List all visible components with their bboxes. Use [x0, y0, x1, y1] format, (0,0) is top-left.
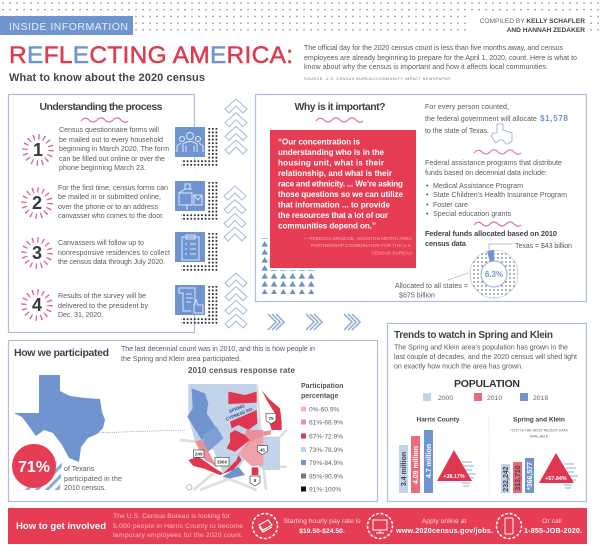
quote box: — REBECCA BRISCOE, HOUSTON METRO AREA	[303, 236, 413, 241]
texas map	[14, 375, 105, 462]
section tab: inside information: INSIDE INFORMATION	[9, 21, 128, 33]
chart title: POPULATION	[454, 378, 520, 390]
label: all states: $675 billion	[399, 292, 435, 300]
chart: spring and klein: 313,710	[515, 465, 522, 491]
step 2	[24, 184, 168, 220]
intro text: know about why the census is important and how it affects local communities.	[304, 63, 548, 71]
chart: harris county: 3.4 million	[401, 452, 408, 486]
body: The U.S. Census Bureau is looking for	[113, 513, 231, 520]
chart: spring and klein: *2017 IS THE MOST RECENT DATA	[510, 428, 568, 432]
chevrons up, top	[225, 99, 247, 154]
chart: spring and klein: 232,242	[503, 466, 510, 492]
bullet list: State Children’s Health Insurance Program	[433, 191, 567, 199]
donut heading: Federal funds allocated based on 2010	[425, 229, 557, 238]
step 4: Dec. 31, 2020.	[58, 311, 103, 319]
quote box: communities depend on.”	[278, 222, 376, 230]
intro text	[304, 44, 577, 71]
chart legend	[423, 393, 548, 402]
legend: 85%-90.9%	[309, 474, 343, 480]
header dot pattern	[0, 0, 600, 34]
callout text	[64, 465, 122, 492]
precinct map: 45	[260, 447, 265, 452]
heading: How to get involved	[16, 521, 106, 532]
intro: the Spring and Klein area participated.	[121, 355, 241, 363]
per-person allocation: For every person counted,	[425, 103, 509, 111]
quote box: relationship, and what is their	[278, 169, 393, 178]
quote box: CENSUS BUREAU	[372, 250, 413, 256]
section tab: inside information	[0, 16, 133, 35]
phone number: 1-855-JOB-2020.	[524, 526, 582, 535]
per-person allocation: the federal government will allocate	[425, 115, 537, 123]
apply online	[395, 518, 493, 535]
panel: how we participated	[8, 340, 378, 502]
intro	[121, 345, 315, 363]
divider	[488, 416, 490, 495]
step 1: beginning in March 2020. The form	[59, 145, 169, 153]
body text	[394, 344, 577, 370]
icon: computer	[368, 514, 392, 538]
chevrons up, bottom	[225, 273, 247, 328]
quote box: those questions so we can utilize	[278, 190, 403, 199]
chart: spring and klein: *366,577	[527, 462, 534, 490]
quote box: housing unit, what is their	[278, 158, 385, 168]
apply online: Apply online at	[422, 518, 466, 525]
quote box: understanding who is in the	[278, 148, 384, 157]
step 1	[25, 126, 169, 172]
quote box: the resources that a lot of our	[278, 211, 389, 220]
chevrons up, middle	[224, 186, 246, 241]
per-person allocation	[425, 103, 569, 135]
callout: 71 percent: 71%	[18, 459, 50, 476]
panel: understanding the process	[8, 94, 194, 332]
programs intro: Federal assistance programs that distribute	[425, 159, 562, 167]
icon: people	[175, 127, 218, 168]
apply online: www.2020census.gov/jobs.	[395, 526, 493, 535]
step 1: 1	[33, 140, 43, 160]
chart: spring and klein: AVAILABLE	[530, 434, 549, 438]
legend	[301, 383, 343, 494]
legend: 0%-60.9%	[309, 406, 340, 414]
step 2: be mailed in or submitted online,	[58, 193, 161, 201]
quote box: that information ... to provide	[278, 200, 390, 210]
panel: how to get involved	[8, 508, 587, 544]
chart legend: 2010	[487, 395, 502, 402]
precinct map: 8	[254, 478, 257, 483]
credit: COMPILED BY KELLY SCHAFLER	[480, 18, 585, 25]
bullet list: Medical Assistance Program	[433, 182, 523, 190]
title: REFLECTING AMERICA:	[9, 42, 293, 69]
quote box: “Our concentration is	[278, 138, 360, 146]
callout text: of Texans	[64, 465, 95, 473]
phone number: Or call	[542, 518, 562, 525]
donut heading	[425, 229, 557, 248]
chart: harris county: Harris County	[417, 416, 460, 424]
body: 5,000 people in Harris County to become	[113, 523, 243, 530]
step 3: Canvassers will follow up to	[58, 239, 144, 247]
chart: spring and klein: Spring and Klein	[513, 416, 565, 424]
map title: 2010 census response rate	[188, 366, 296, 375]
intro text: employees are already beginning to prepare for the April 1, 2020, count. Here is what to	[304, 54, 577, 62]
icon: phone	[496, 514, 522, 538]
chart: harris county: +38.17%	[443, 474, 465, 480]
programs intro	[425, 159, 562, 177]
chevrons right	[268, 314, 360, 330]
step 4: 4	[32, 295, 42, 315]
bullet list: Special education grants	[433, 210, 511, 218]
squiggle	[474, 222, 521, 226]
icon: clipboard	[175, 232, 218, 272]
step 4: delivered to the president by	[58, 302, 148, 310]
source: SOURCE: U.S. CENSUS BUREAU/COMMUNITY IMPACT NEWSPAPER	[304, 77, 450, 81]
icon: mailbox	[175, 181, 218, 222]
heading: How we participated	[14, 347, 109, 359]
step 1: Census questionnaire forms will	[59, 126, 159, 134]
callout text: participated in the	[64, 475, 122, 483]
step 3: 3	[32, 243, 42, 263]
bullet list	[426, 182, 567, 218]
step 2: 2	[32, 193, 42, 213]
bullet list: •	[426, 201, 429, 209]
heading: Understanding the process	[40, 101, 163, 113]
icon: texas outline	[491, 124, 512, 144]
precinct map: CYPRESS RD.	[225, 406, 254, 422]
icon: document and hand	[175, 285, 218, 326]
donut heading: census data	[425, 239, 467, 248]
bullet list: •	[426, 210, 429, 218]
legend: Participation	[301, 383, 343, 390]
per-person allocation: $1,578	[540, 114, 569, 123]
squiggle	[474, 150, 521, 154]
chart: spring and klein	[501, 416, 578, 493]
body	[113, 513, 243, 539]
chart: harris county: 4.7 million	[426, 444, 433, 478]
icon: money	[252, 514, 278, 538]
quote box: race and ethnicity. ... We’re asking	[278, 180, 403, 188]
legend: 91%-100%	[309, 486, 341, 494]
chart: harris county: 4.09 million	[413, 446, 420, 484]
squiggle	[81, 118, 128, 122]
per-person allocation: to the state of Texas.	[425, 127, 489, 135]
leader line	[92, 430, 185, 433]
callout: 71 percent	[12, 444, 62, 490]
panel: why is it important	[256, 94, 586, 302]
programs intro: funds based on decennial data include:	[425, 169, 547, 177]
step 2: over the phone or to an address	[58, 203, 158, 211]
label: all states	[395, 273, 468, 300]
pay rate: Starting hourly pay rate is	[283, 518, 361, 525]
panel: trends to watch	[388, 324, 586, 502]
chart: spring and klein: +57.84%	[545, 476, 567, 482]
step 1: be mailed out to every household	[59, 136, 163, 144]
body text: The Spring and Klein area’s population has grown in the	[394, 344, 568, 352]
subtitle: What to know about the 2020 census	[9, 72, 205, 84]
precinct map: SPRING	[228, 403, 246, 414]
quote box	[270, 130, 416, 268]
body text: on exactly how much the area has grown.	[394, 362, 523, 370]
connector line between icons	[193, 160, 195, 290]
precinct map: 249	[195, 452, 203, 457]
squiggle	[316, 118, 363, 122]
credit: AND HANNAH ZEDAKER	[507, 27, 585, 34]
quote box: PARTNERSHIP COORDINATOR FOR THE U.S.	[311, 243, 412, 248]
bullet list: Foster care	[433, 201, 468, 209]
intro: The last decennial count was in 2010, and this is how people in	[121, 345, 315, 353]
step 2: For the first time, census forms can	[58, 184, 168, 192]
pay rate	[283, 518, 361, 535]
bullet list: •	[426, 191, 429, 199]
step 3: the census data through July 2020.	[58, 258, 165, 266]
legend: 67%-72.9%	[309, 434, 343, 440]
step 2: canvasser who comes to the door.	[58, 212, 164, 220]
donut chart: 6.3%	[485, 270, 503, 279]
step 1: phone beginning March 23.	[59, 164, 146, 172]
body text: last couple of decades, and the 2020 census will shed light	[394, 353, 577, 361]
precinct map: 75	[268, 416, 274, 421]
pay rate: $19.50-$24.50.	[299, 528, 345, 535]
step 3: nonresponsive residences to collect	[58, 249, 170, 257]
precinct map	[180, 384, 287, 490]
donut chart	[470, 250, 518, 298]
bullet list: •	[426, 182, 429, 190]
legend: 61%-66.9%	[309, 420, 343, 426]
phone number	[524, 518, 582, 535]
label: texas share: Texas = $43 billion	[515, 242, 572, 250]
step 1: can be filled out online or over the	[59, 155, 165, 163]
legend: percentage	[301, 393, 338, 400]
step 3	[24, 239, 170, 266]
heading: Why is it important?	[294, 101, 386, 113]
precinct map: 1960	[217, 459, 228, 464]
chart legend: 2000	[438, 395, 453, 402]
callout text: 2010 census.	[64, 484, 106, 492]
step 4	[24, 292, 148, 319]
heading: Trends to watch in Spring and Klein	[394, 330, 553, 341]
body: temporary employees for the 2020 count.	[113, 532, 243, 539]
chart legend: 2018	[533, 395, 548, 402]
legend: 73%-78.9%	[309, 447, 343, 454]
triangle pattern	[261, 238, 317, 294]
step 4: Results of the survey will be	[58, 292, 146, 300]
chart: harris county	[399, 416, 476, 493]
intro text: The official day for the 2020 census count is less than five months away, and census	[304, 44, 563, 52]
label: all states: Allocated to all states =	[395, 282, 468, 290]
legend: 79%-84.9%	[309, 460, 343, 467]
label: texas share	[489, 242, 572, 252]
credit	[480, 18, 585, 34]
